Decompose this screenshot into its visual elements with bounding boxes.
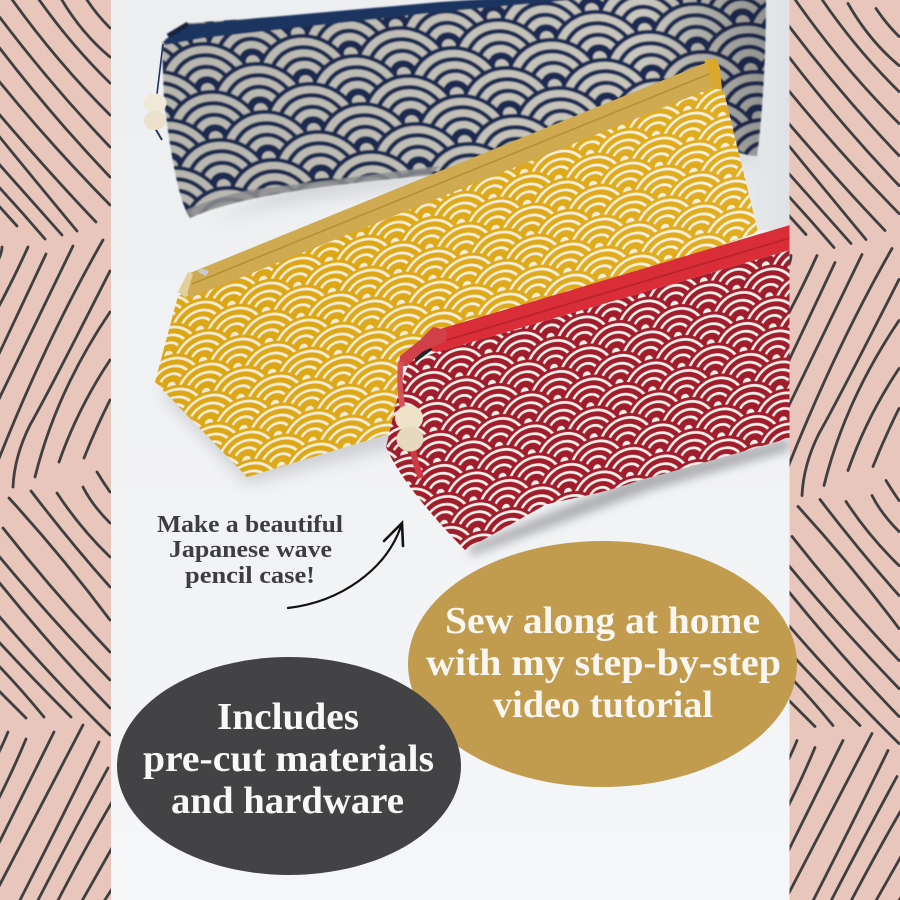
badge text: includes materials: Includes	[217, 696, 359, 738]
zipper: red tape and pull	[399, 225, 790, 366]
callout: make a beautiful pencil case: Make a beautiful	[157, 512, 343, 538]
badge text: includes materials	[143, 696, 434, 822]
icon: red zipper pull tape and beads	[395, 362, 424, 478]
callout: make a beautiful pencil case: Japanese wave	[169, 537, 332, 563]
badge text: sew along	[426, 600, 781, 726]
badge text: sew along: Sew along at home	[445, 600, 760, 642]
badge: sew along, gold oval	[408, 541, 797, 787]
arrow: callout pointing at red pencil case	[288, 523, 403, 608]
pencil case: navy wave fabric	[144, 0, 766, 226]
panel: left pink hatch pattern	[0, 0, 112, 900]
callout: make a beautiful pencil case: pencil case!	[185, 563, 315, 589]
panel: right pink hatch pattern	[785, 0, 900, 900]
badge text: sew along: with my step-by-step	[426, 642, 781, 684]
icon: navy zipper beads	[144, 44, 166, 140]
pencil case: mustard yellow wave fabric	[155, 58, 758, 484]
badge text: includes materials: and hardware	[171, 780, 404, 822]
badge text: sew along: video tutorial	[493, 684, 713, 726]
badge text: includes materials: pre-cut materials	[143, 738, 434, 780]
zipper: yellow tape	[178, 58, 722, 298]
pencil case: red wave fabric	[386, 225, 790, 556]
callout: make a beautiful pencil case	[157, 512, 343, 589]
badge: includes, dark oval	[117, 657, 461, 875]
